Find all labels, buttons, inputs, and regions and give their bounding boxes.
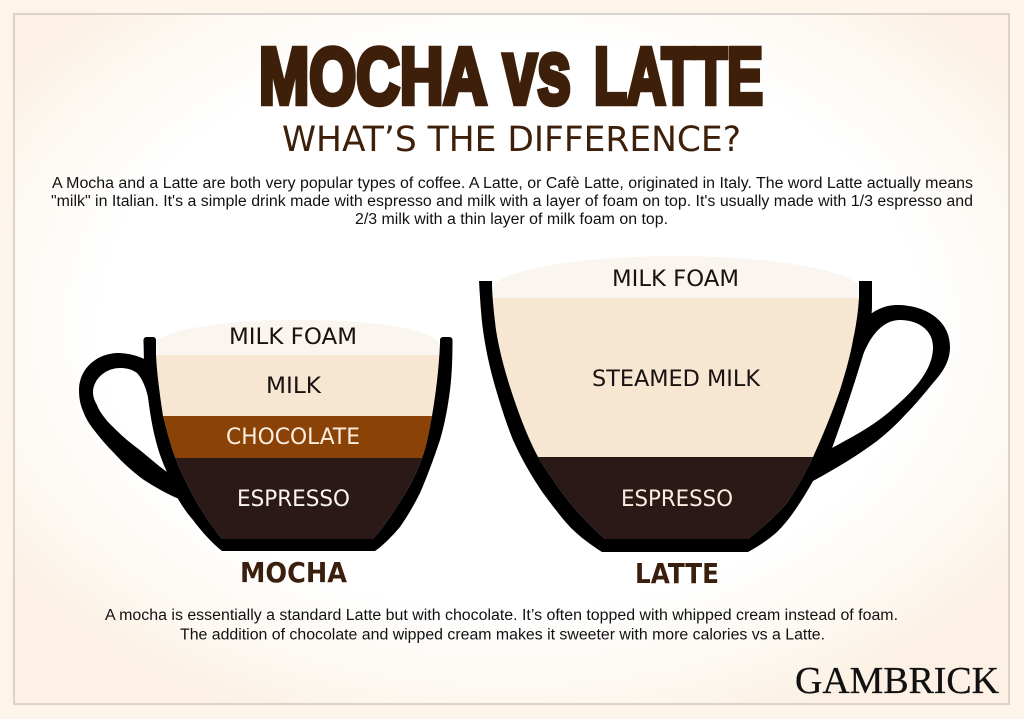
mocha left rim	[144, 337, 156, 345]
label: espresso: ESPRESSO	[621, 487, 733, 512]
label: espresso: ESPRESSO	[237, 487, 350, 512]
latte layers	[485, 256, 865, 540]
mocha name: MOCHA	[240, 556, 347, 589]
mocha cup	[79, 320, 452, 551]
label: milk: MILK	[266, 374, 322, 399]
closing paragraph	[105, 607, 898, 644]
label: milk foam: MILK FOAM	[229, 325, 357, 350]
intro paragraph: 2/3 milk with a thin layer of milk foam on top.	[355, 211, 668, 228]
latte handle	[813, 305, 950, 481]
mocha layers	[150, 320, 450, 540]
title	[259, 22, 763, 124]
title: MOCHA	[259, 32, 487, 120]
mocha cup body	[144, 340, 452, 551]
title: LATTE	[594, 32, 763, 120]
latte cup	[479, 256, 950, 552]
latte cup body	[479, 281, 872, 552]
label: steamed milk: STEAMED MILK	[592, 367, 761, 392]
subtitle: WHAT’S THE DIFFERENCE?	[282, 120, 741, 160]
closing paragraph: A mocha is essentially a standard Latte but with chocolate. It’s often topped with whipped cream instead of foam.	[105, 607, 898, 624]
latte name: LATTE	[635, 557, 719, 590]
mocha handle	[79, 353, 179, 499]
brand logo: GAMBRICK	[795, 660, 1000, 702]
intro paragraph: "milk" in Italian. It's a simple drink made with espresso and milk with a layer of foam on top. It's usually made with 1/3 espresso and	[51, 193, 973, 210]
label: chocolate: CHOCOLATE	[226, 425, 360, 450]
intro paragraph	[51, 175, 973, 228]
closing paragraph: The addition of chocolate and wipped cream makes it sweeter with more calories vs a Latte.	[180, 626, 825, 644]
intro paragraph: A Mocha and a Latte are both very popular types of coffee. A Latte, or Cafè Latte, originated in Italy. The word Latte actually means	[52, 175, 973, 192]
title: vs	[503, 22, 571, 124]
label: milk foam: MILK FOAM	[612, 267, 739, 292]
mocha right rim	[440, 337, 452, 345]
